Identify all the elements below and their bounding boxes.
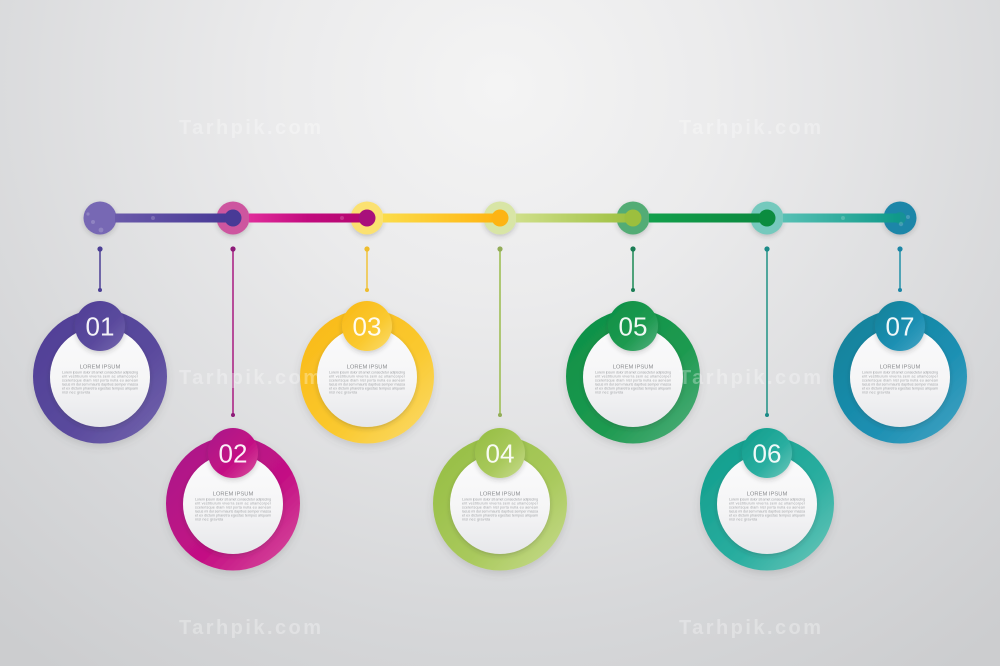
panel: step 02: [166, 428, 300, 570]
panel: step 05: et ex dictum pharetra egestas tempus aliquam: [595, 386, 671, 390]
panel: step 03: elit vestibulum viverra sem ac ullamcorper: [329, 374, 406, 378]
node halos: [84, 202, 916, 234]
panel: step 05: Lorem ipsum dolor sit amet consectetur adipiscing: [595, 370, 671, 374]
panel: step 04: LOREM IPSUM: [480, 492, 520, 498]
watermarks: Tarhpik.com: [679, 367, 821, 389]
panel: step 07: et ex dictum pharetra egestas tempus aliquam: [862, 386, 938, 390]
panel: step 04: [433, 428, 567, 570]
panel: step 06: LOREM IPSUM: [747, 492, 787, 498]
panel: step 03: et ex dictum pharetra egestas tempus aliquam: [329, 386, 405, 390]
panel: step 04: elit vestibulum viverra sem ac ullamcorper: [462, 502, 539, 506]
panel: step 05: scelerisque diam nisl porta nulla eu aenean: [595, 378, 671, 382]
panel: step 04: 04: [486, 438, 514, 468]
panel: step 07: lacus mi dui sem mauris dapibus semper massa: [862, 382, 939, 386]
panel: step 02: 02: [219, 438, 247, 468]
panel: step 05: elit vestibulum viverra sem ac ullamcorper: [595, 374, 672, 378]
panel: step 04: nisi nec gravida: [462, 518, 491, 522]
panel: step 02: et ex dictum pharetra egestas tempus aliquam: [195, 514, 271, 518]
connector 07: [897, 246, 903, 292]
panel: step 06: [700, 428, 834, 570]
watermarks: Tarhpik.com: [179, 367, 321, 389]
panel: step 03: [300, 301, 434, 444]
panel: step 03: scelerisque diam nisl porta nulla eu aenean: [329, 378, 405, 382]
connector 06: [764, 246, 770, 417]
panel: step 07: elit vestibulum viverra sem ac ullamcorper: [862, 374, 939, 378]
panel: step 04: et ex dictum pharetra egestas tempus aliquam: [462, 514, 538, 518]
watermarks: Tarhpik.com: [179, 617, 321, 639]
panel: step 07: nisi nec gravida: [862, 390, 891, 394]
panel: step 03: lacus mi dui sem mauris dapibus semper massa: [329, 382, 406, 386]
panel: step 06: elit vestibulum viverra sem ac ullamcorper: [729, 502, 806, 506]
panel: step 06: nisi nec gravida: [729, 518, 758, 522]
connector 03: [364, 246, 370, 292]
connector 01: [97, 246, 103, 292]
panel: step 06: 06: [753, 438, 781, 468]
panel: step 01: lacus mi dui sem mauris dapibus semper massa: [62, 382, 139, 386]
panel: step 05: nisi nec gravida: [595, 390, 624, 394]
panel: step 02: scelerisque diam nisl porta nulla eu aenean: [195, 506, 271, 510]
panel: step 02: LOREM IPSUM: [213, 492, 253, 498]
watermarks: Tarhpik.com: [679, 617, 821, 639]
connector 02: [230, 246, 236, 417]
watermarks: Tarhpik.com: [179, 117, 321, 139]
panel: step 06: scelerisque diam nisl porta nulla eu aenean: [729, 506, 805, 510]
panel: step 02: nisi nec gravida: [195, 518, 224, 522]
panel: step 07: scelerisque diam nisl porta nulla eu aenean: [862, 378, 938, 382]
panel: step 05: [566, 301, 700, 444]
panel: step 01: LOREM IPSUM: [80, 364, 120, 370]
panel: step 01: 01: [86, 312, 114, 342]
panel: step 03: LOREM IPSUM: [347, 364, 387, 370]
panel: step 04: lacus mi dui sem mauris dapibus semper massa: [462, 510, 539, 514]
panel: step 07: Lorem ipsum dolor sit amet consectetur adipiscing: [862, 370, 938, 374]
panel: step 01: [33, 301, 167, 444]
panel: step 05: 05: [619, 312, 647, 342]
watermarks: [179, 117, 821, 639]
segments: [115, 214, 233, 222]
node centres: [224, 210, 242, 226]
panel: step 03: nisi nec gravida: [329, 390, 358, 394]
panel: step 06: Lorem ipsum dolor sit amet consectetur adipiscing: [729, 498, 805, 502]
panel: step 04: scelerisque diam nisl porta nulla eu aenean: [462, 506, 538, 510]
connector 05: [630, 246, 636, 292]
panel: step 07: [833, 301, 967, 444]
timeline bar: [84, 202, 916, 234]
panel: step 07: 07: [886, 312, 914, 342]
node sparkles: [86, 212, 910, 232]
panel: step 01: Lorem ipsum dolor sit amet consectetur adipiscing: [62, 370, 138, 374]
panel: step 03: Lorem ipsum dolor sit amet consectetur adipiscing: [329, 370, 405, 374]
panel: step 02: Lorem ipsum dolor sit amet consectetur adipiscing: [195, 498, 271, 502]
panel: step 05: LOREM IPSUM: [613, 364, 653, 370]
panel: step 03: 03: [353, 312, 381, 342]
panel: step 01: scelerisque diam nisl porta nulla eu aenean: [62, 378, 138, 382]
panel: step 01: et ex dictum pharetra egestas tempus aliquam: [62, 386, 138, 390]
connector 04: [497, 246, 503, 417]
panel: step 06: et ex dictum pharetra egestas tempus aliquam: [729, 514, 805, 518]
watermarks: Tarhpik.com: [679, 117, 821, 139]
panel: step 04: Lorem ipsum dolor sit amet consectetur adipiscing: [462, 498, 538, 502]
panel: step 01: nisi nec gravida: [62, 390, 91, 394]
panel: step 05: lacus mi dui sem mauris dapibus semper massa: [595, 382, 672, 386]
panel: step 02: elit vestibulum viverra sem ac ullamcorper: [195, 502, 272, 506]
panel: step 02: lacus mi dui sem mauris dapibus semper massa: [195, 510, 272, 514]
panel: step 07: LOREM IPSUM: [880, 364, 920, 370]
panel: step 01: elit vestibulum viverra sem ac ullamcorper: [62, 374, 139, 378]
panel: step 06: lacus mi dui sem mauris dapibus semper massa: [729, 510, 806, 514]
